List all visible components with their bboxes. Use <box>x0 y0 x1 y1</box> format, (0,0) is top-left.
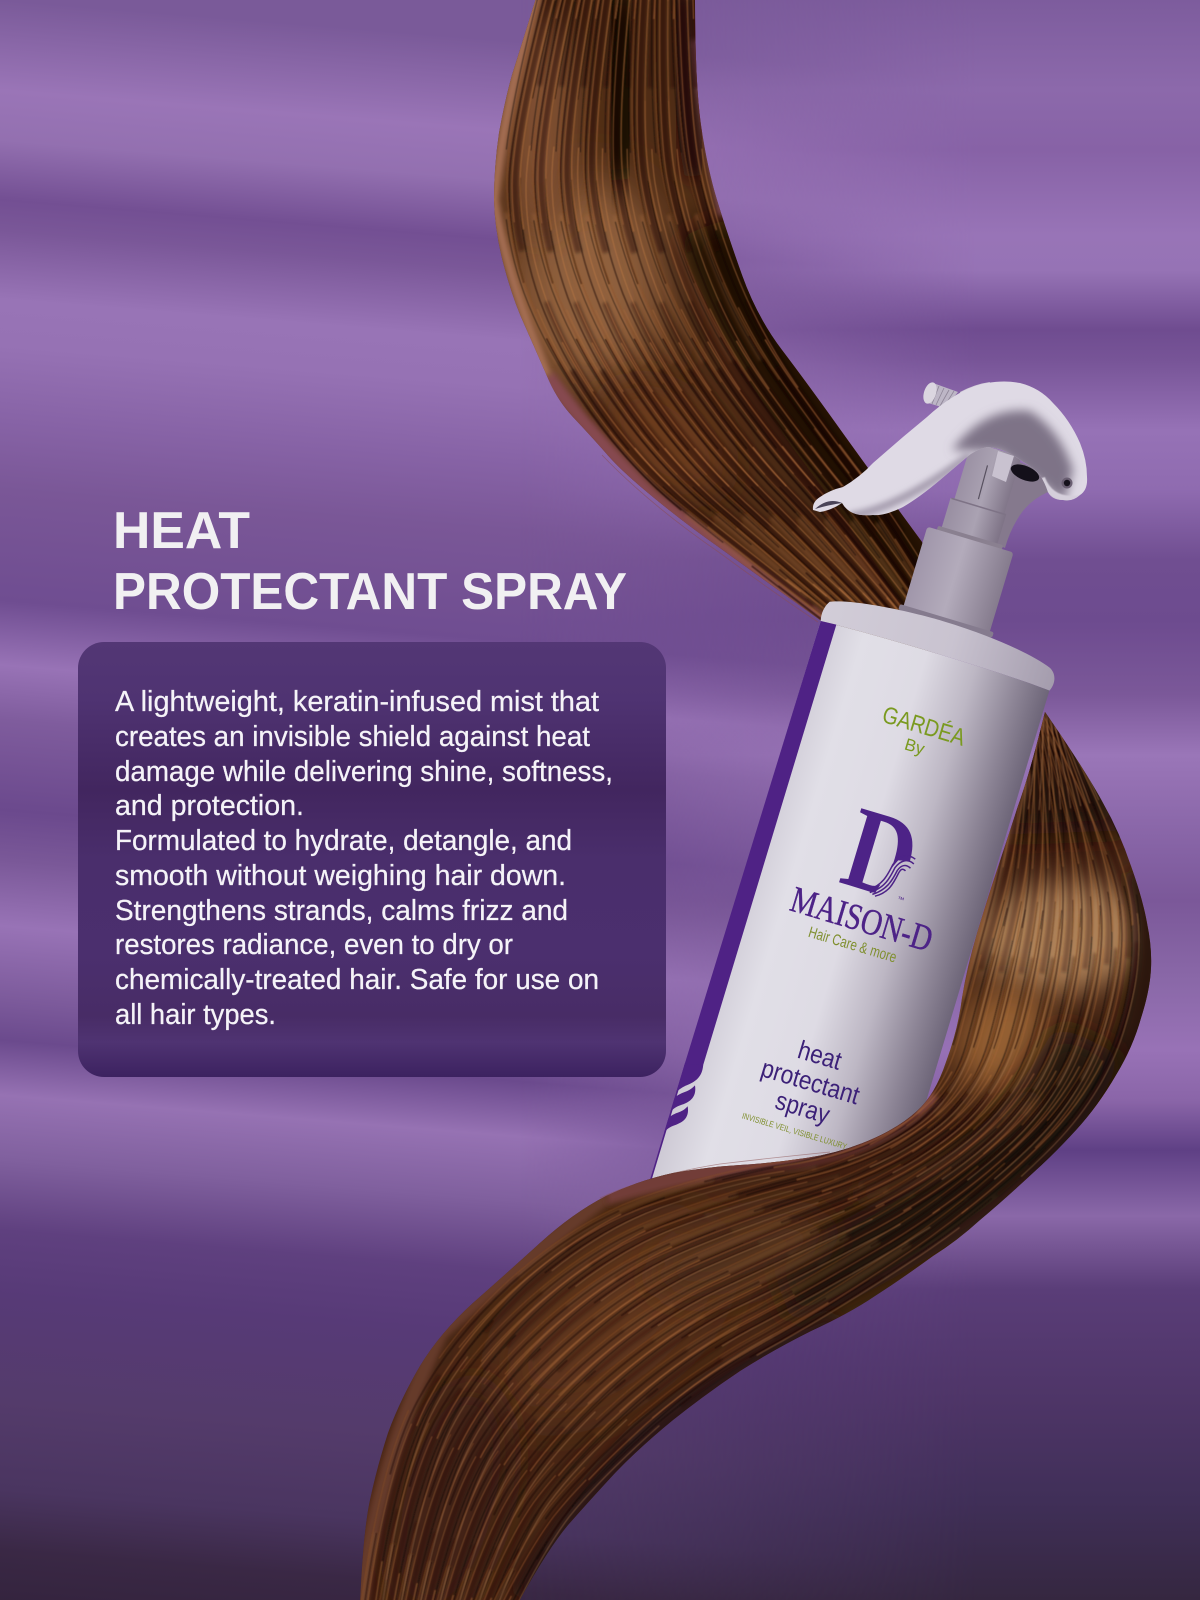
label: tagline: INVISIBLE VEIL, VISIBLE LUXURY <box>741 1111 848 1152</box>
title: HEAT <box>113 502 250 560</box>
body copy: chemically-treated hair. Safe for use on <box>115 964 599 996</box>
spray head <box>812 382 1088 516</box>
body copy <box>115 686 613 1031</box>
label: trademark: ™ <box>896 896 905 905</box>
label: Hair Care & more: Hair Care & more <box>806 924 898 966</box>
label: MAISON-D: MAISON-D <box>786 879 937 960</box>
body copy: creates an invisible shield against heat <box>115 721 590 753</box>
bottle body <box>642 618 1050 1277</box>
body copy: Formulated to hydrate, detangle, and <box>115 825 572 857</box>
bottle body and label, tilted <box>642 414 1113 1277</box>
title: PROTECTANT SPRAY <box>113 563 627 621</box>
body copy: restores radiance, even to dry or <box>115 929 513 961</box>
body copy: and protection. <box>115 790 304 822</box>
pump collar <box>898 435 1044 638</box>
label: product name: heat <box>795 1034 846 1076</box>
body copy: Strengthens strands, calms frizz and <box>115 895 568 927</box>
stem clip <box>992 451 1014 482</box>
label: GARDÉA: GARDÉA <box>879 701 968 752</box>
body copy: damage while delivering shine, softness, <box>115 756 613 788</box>
purple side strip <box>646 619 836 1198</box>
label: product name: protectant <box>758 1053 864 1111</box>
adjuster knob <box>921 381 990 408</box>
logo: D with hair flourish: D <box>830 781 933 926</box>
hair strand: upper section behind bottle <box>494 0 943 656</box>
body copy: smooth without weighing hair down. <box>115 860 566 892</box>
trigger lower body <box>975 445 1048 548</box>
spray bottle <box>650 382 1088 1179</box>
bottle shoulder band <box>819 587 1062 691</box>
hair strand: lower section wrapping bottle <box>340 700 1170 1600</box>
label: product name <box>750 1026 872 1136</box>
trigger opening <box>1008 461 1042 485</box>
label: By: By <box>902 735 927 759</box>
title <box>113 502 627 621</box>
nozzle hole <box>1062 478 1072 488</box>
body copy: A lightweight, keratin-infused mist that <box>115 686 599 718</box>
body copy: all hair types. <box>115 999 276 1031</box>
label: product name: spray <box>772 1085 833 1130</box>
text panel background <box>78 642 666 1077</box>
